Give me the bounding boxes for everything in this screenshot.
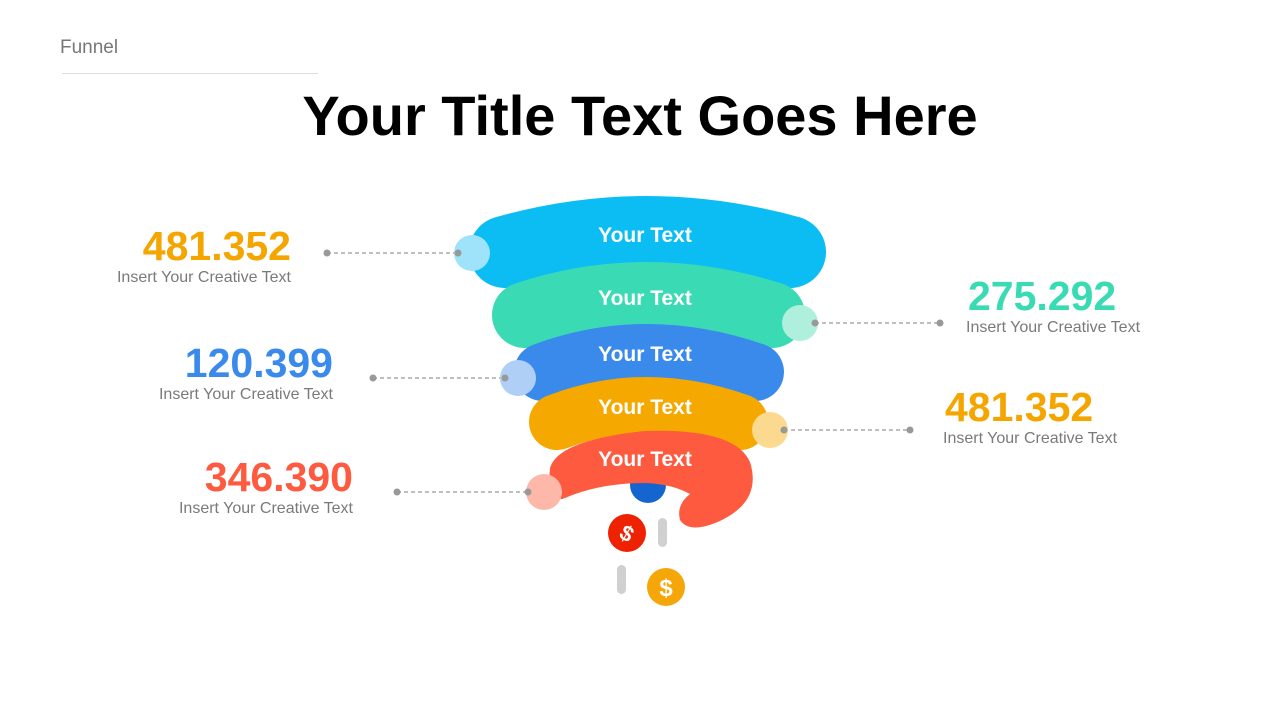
stat 2 right: 481.352	[945, 384, 1093, 430]
coins	[608, 467, 685, 606]
stat 2 right: Insert Your Creative Text	[943, 430, 1117, 447]
band labels: Your Text	[598, 287, 692, 310]
title: Your Title Text Goes Here	[302, 84, 978, 147]
stat 2 left	[159, 340, 333, 403]
bands	[505, 232, 790, 528]
stat 2 right	[943, 384, 1117, 447]
stat 3 left	[179, 454, 353, 517]
band labels: Your Text	[598, 448, 692, 471]
stat 1 right	[966, 273, 1140, 336]
stat 3 left: 346.390	[205, 454, 353, 500]
coins: $	[615, 520, 638, 547]
anchor circles	[454, 235, 818, 510]
band labels: Your Text	[598, 224, 692, 247]
stat 1 right: Insert Your Creative Text	[966, 319, 1140, 336]
stat 1 left	[117, 223, 291, 286]
coins: $	[659, 575, 673, 602]
section label: Funnel	[60, 37, 118, 58]
band labels: Your Text	[598, 343, 692, 366]
stat 3 left: Insert Your Creative Text	[179, 500, 353, 517]
band labels: Your Text	[598, 396, 692, 419]
stat 1 left: Insert Your Creative Text	[117, 269, 291, 286]
stat 2 left: Insert Your Creative Text	[159, 386, 333, 403]
band labels	[598, 224, 692, 471]
stat 2 left: 120.399	[185, 340, 333, 386]
leader lines	[327, 253, 940, 492]
stat 1 left: 481.352	[143, 223, 291, 269]
stat 1 right: 275.292	[968, 273, 1116, 319]
